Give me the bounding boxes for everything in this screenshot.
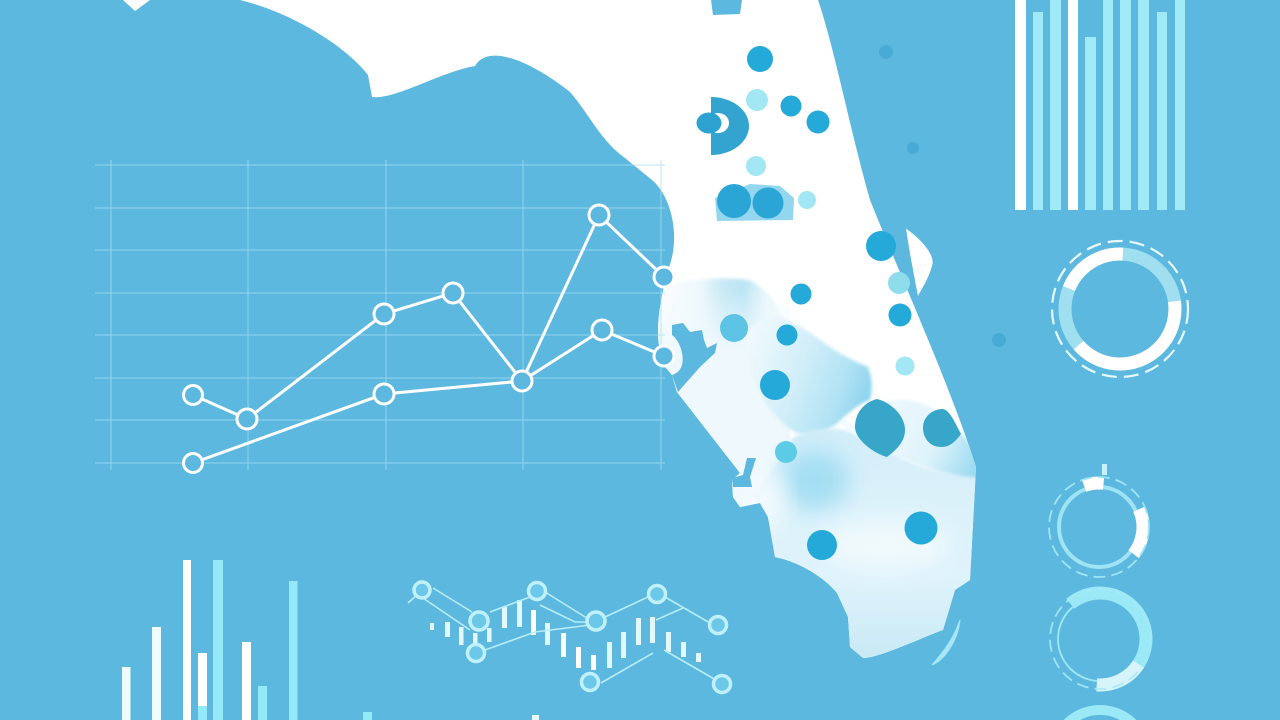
Charlotte Harbor [732, 458, 756, 487]
cropped bar stubs: bottom edge [363, 712, 539, 720]
east coast lagoon [899, 228, 918, 296]
connecting lines [408, 588, 716, 683]
shaded region: west fade [658, 299, 790, 507]
mini bars [430, 600, 701, 670]
white bars [122, 560, 251, 720]
line chart [95, 160, 674, 472]
highlight: southwest coast [747, 470, 783, 530]
white bars [1015, 0, 1078, 210]
east coast island [905, 228, 933, 296]
half disc marker [711, 97, 749, 155]
pale dots [720, 89, 914, 463]
data dots on map [696, 45, 1006, 560]
large lens marker [855, 399, 905, 457]
marker dots [696, 46, 938, 560]
pale bars [198, 560, 298, 720]
block behind central dots [715, 184, 794, 221]
chart nodes [414, 582, 730, 692]
shadow: interior [781, 450, 849, 510]
shaded region: lake crescent [838, 400, 980, 478]
shaded region: southern peninsula [755, 428, 985, 670]
small connected chart: bottom centre [408, 582, 730, 692]
Florida Keys arc [932, 620, 960, 665]
shaded region: central west [658, 277, 779, 507]
faint dots on background [879, 45, 1006, 347]
cut-off marker [923, 409, 961, 447]
highlight: lake sliver [846, 403, 867, 428]
Tampa Bay [672, 323, 717, 392]
highlight: southeast [820, 521, 950, 569]
donut ring 1 [1048, 237, 1192, 381]
series A [193, 215, 664, 419]
south Florida shaded regions [650, 279, 985, 670]
grid [95, 160, 665, 470]
bar chart: top right [1015, 0, 1185, 210]
pale bars [1033, 0, 1185, 210]
donut ring 4 (cropped) [1064, 705, 1136, 720]
map: Florida [123, 0, 985, 670]
donut ring 3 [1035, 574, 1165, 704]
block: north edge [711, 0, 742, 15]
half disc notch [707, 113, 729, 133]
state landmass [240, 0, 976, 658]
panhandle fragment [123, 0, 150, 11]
shaded region: central lens [746, 317, 872, 436]
donut ring 2 [1041, 464, 1157, 585]
series B [193, 330, 664, 463]
data points [184, 205, 674, 472]
bar chart: bottom left [122, 560, 298, 720]
